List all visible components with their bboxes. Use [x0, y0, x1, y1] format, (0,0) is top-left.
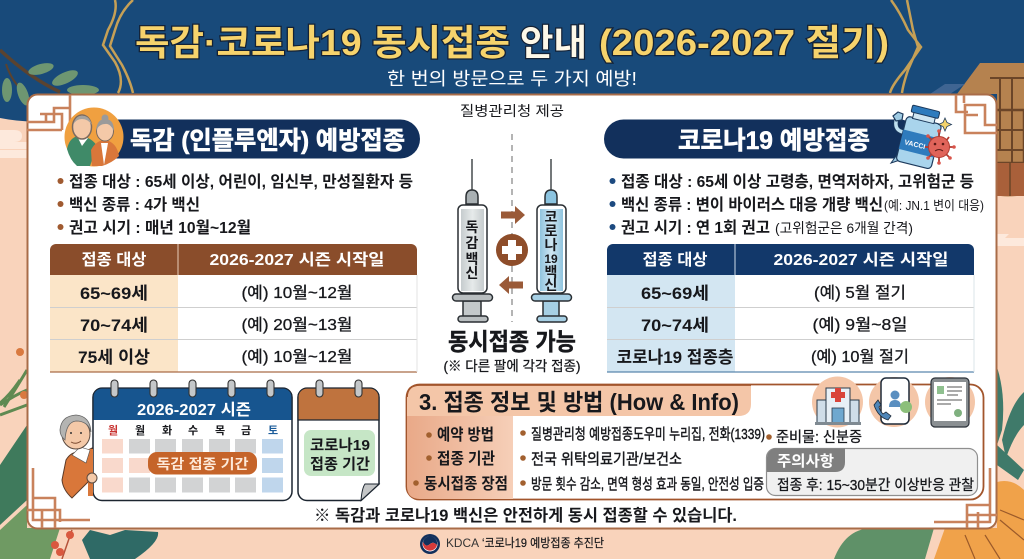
info row details: 전국 위탁의료기관/보건소: [531, 451, 682, 468]
flu period label: [148, 452, 257, 474]
calendar: covid period: [298, 380, 379, 500]
covid period label: [304, 430, 375, 476]
decoration: hanok window right: [930, 63, 1024, 196]
info row labels: 동시접종 장점: [424, 475, 508, 493]
footer credit: ‘코로나19 예방접종 추진단: [482, 536, 604, 550]
covid table: 코로나19 접종층: [616, 348, 734, 367]
covid syringe label: 로: [545, 223, 558, 239]
covid table: [607, 244, 974, 372]
credit line: 질병관리청 제공: [460, 103, 564, 119]
info heading: 3. 접종 정보 및 방법 (How & Info): [419, 389, 739, 415]
influenza table: (예) 20월~13월: [242, 316, 352, 334]
icon: plus: [496, 234, 528, 266]
flu syringe label: 독: [466, 219, 479, 235]
covid table: 65~69세: [641, 284, 709, 303]
covid heading pill: [604, 120, 919, 158]
white card: [28, 94, 996, 528]
gold brackets right: [890, 0, 921, 93]
influenza table: (예) 10월~12월: [242, 348, 352, 366]
panel: how and info: [406, 376, 984, 500]
flu syringe label: 감: [466, 235, 479, 251]
title text: 독감·코로나19 동시접종: [135, 22, 510, 63]
icon: covid syringe: [532, 159, 572, 322]
footer credit: KDCA: [446, 538, 479, 550]
weekday labels: 월: [135, 423, 145, 437]
covid heading: 코로나19 예방접종: [678, 127, 870, 155]
covid table: 접종 대상: [642, 251, 708, 269]
flu period label: 독감 접종 기간: [156, 456, 249, 472]
icon: flu syringe: [452, 159, 492, 322]
title text: 안내: [520, 22, 587, 63]
influenza table: (예) 10월~12월: [242, 284, 352, 302]
influenza bullets: [58, 173, 413, 237]
influenza bullets: 접종 대상 : 65세 이상, 어린이, 임신부, 만성질환자 등: [69, 173, 413, 191]
title banner: [103, 0, 921, 93]
preparation item: 준비물: 신분증: [776, 429, 862, 446]
covid bullets: [610, 173, 984, 237]
influenza table: [50, 244, 417, 372]
info row labels: 접종 기관: [437, 450, 495, 468]
info row details: [520, 426, 765, 493]
weekday labels: 수: [188, 424, 198, 437]
icon: hospital: [812, 376, 863, 428]
weekday labels: 목: [215, 424, 225, 437]
info row labels: [413, 426, 508, 493]
corner ornaments: [27, 95, 997, 528]
gold brackets: [103, 0, 133, 93]
covid syringe label: 코: [545, 209, 558, 225]
influenza table: 접종 대상: [82, 251, 147, 269]
covid bullets: (고위험군은 6개월 간격): [775, 220, 913, 236]
info row labels: 예약 방법: [437, 426, 494, 444]
panel: influenza: [50, 108, 420, 372]
arrow left: [499, 276, 523, 294]
center heading: 동시접종 가능: [448, 329, 576, 356]
icon: elderly man with calendar: [60, 415, 97, 498]
covid table: (예) 5월 절기: [814, 284, 906, 302]
covid bullets: (예: JN.1 변이 대응): [884, 198, 984, 213]
weekday labels: 금: [241, 424, 251, 437]
footer note: ※ 독감과 코로나19 백신은 안전하게 동시 접종할 수 있습니다.: [314, 506, 737, 525]
covid period label: 접종 기간: [310, 456, 370, 473]
weekday labels: 화: [162, 423, 172, 437]
influenza table: 75세 이상: [78, 348, 150, 367]
subtitle: 한 번의 방문으로 두 가지 예방!: [387, 69, 637, 89]
decoration: branch top left: [0, 50, 99, 107]
covid syringe label: 나: [545, 237, 558, 253]
info row details: 방문 횟수 감소, 면역 형성 효과 동일, 안전성 입증: [531, 476, 764, 493]
covid table: 70~74세: [641, 316, 709, 335]
panel: center co-administration: [444, 134, 580, 374]
icon: vaccine bottle with virus: [891, 104, 956, 169]
weekday labels: 토: [268, 424, 278, 437]
influenza bullets: 권고 시기 : 매년 10월~12월: [69, 219, 251, 237]
flu syringe label: [466, 219, 479, 281]
arrow right: [501, 206, 525, 224]
icon: KDCA logo: [420, 534, 440, 554]
covid syringe label: 신: [545, 277, 557, 293]
covid bullets: 접종 대상 : 65세 이상 고령층, 면역저하자, 고위험군 등: [621, 173, 974, 191]
weekday labels: 월: [108, 423, 118, 437]
influenza table: 70~74세: [80, 316, 148, 335]
panel: covid: [604, 104, 984, 372]
influenza table: 65~69세: [80, 284, 148, 303]
influenza bullets: 백신 종류 : 4가 백신: [69, 196, 200, 214]
covid bullets: 백신 종류 : 변이 바이러스 대응 개량 백신: [621, 196, 883, 214]
date cells: [102, 439, 283, 492]
icon: tablet document: [925, 377, 975, 427]
footer credit: [420, 534, 604, 554]
covid syringe label: 19: [544, 252, 558, 266]
covid table: 2026-2027 시즌 시작일: [774, 251, 948, 269]
calendar: flu season: [93, 380, 292, 500]
title text: (2026-2027 절기): [599, 22, 889, 63]
covid period label: 코로나19: [310, 437, 370, 454]
info row details: 질병관리청 예방접종도우미 누리집, 전화(1339): [531, 426, 765, 443]
influenza heading pill: [95, 120, 420, 158]
covid syringe label: [544, 209, 558, 293]
flu syringe label: 신: [466, 265, 478, 281]
caution box: 접종 후: 15~30분간 이상반응 관찰: [777, 477, 974, 494]
title text: [135, 22, 889, 63]
center note: (※ 다른 팔에 각각 접종): [444, 358, 580, 374]
icon: elderly couple: [64, 108, 124, 166]
icon: phone consultation: [869, 377, 919, 427]
caution box: [766, 448, 978, 496]
decoration: leaves bottom left: [0, 343, 158, 559]
influenza table: 2026-2027 시즌 시작일: [210, 251, 384, 269]
icon: vaccine bottle with virus: VACCI: [904, 139, 926, 151]
calendar heading: 2026-2027 시즌: [137, 402, 251, 419]
covid syringe label: 백: [545, 264, 557, 280]
caution box: 주의사항: [777, 453, 834, 470]
covid table: (예) 9월~8일: [812, 316, 908, 334]
influenza heading: 독감 (인플루엔자) 예방접종: [130, 127, 405, 155]
covid bullets: 권고 시기 : 연 1회 권고: [621, 219, 770, 237]
weekday labels: [108, 423, 278, 437]
flu syringe label: 백: [466, 251, 478, 267]
decoration: plants and flower bottom right: [834, 367, 1024, 559]
covid table: (예) 10월 절기: [811, 348, 909, 366]
